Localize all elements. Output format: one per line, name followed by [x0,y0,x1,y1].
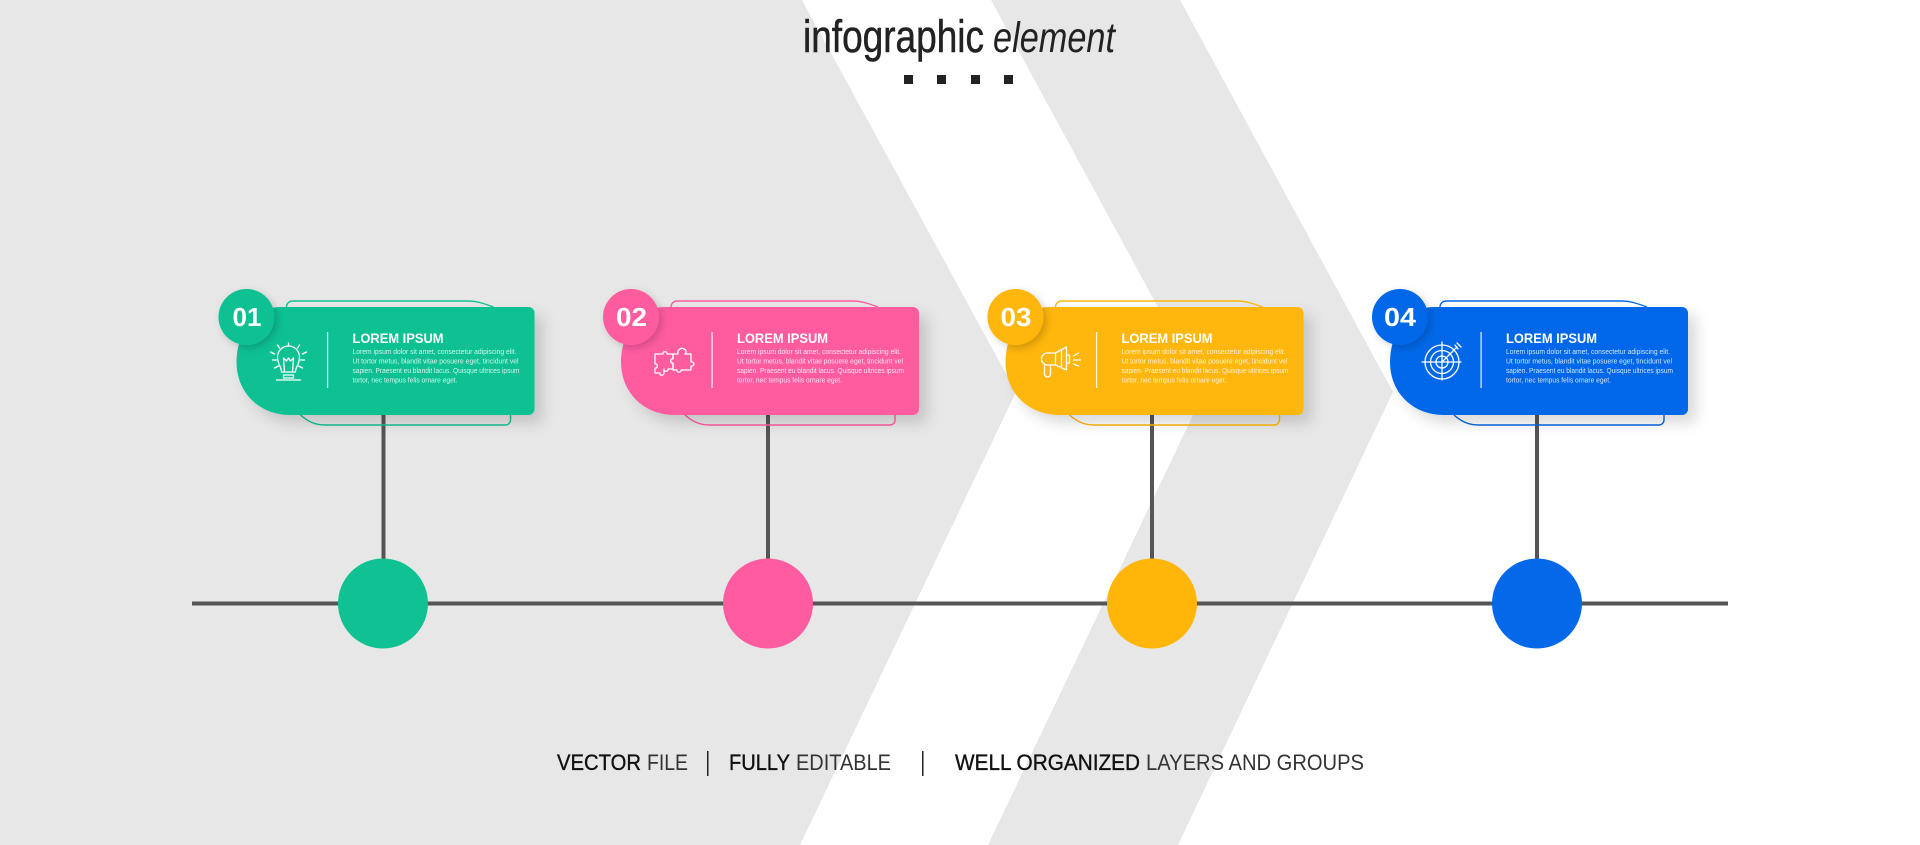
body text: tortor, nec tempus felis ornare eget. [1506,376,1611,384]
title: element [993,14,1117,62]
panel: step 01 [218,289,534,425]
connector 03 [1150,415,1154,565]
card outline [1056,301,1280,425]
footer tagline: EDITABLE [796,750,891,775]
body text: sapien. Praesent eu blandit lacus. Quisque ultrices ipsum [352,366,520,375]
number badge: 01 [232,302,262,332]
body text [737,347,904,384]
body text: Ut tortor metus, blandit vitae posuere eget, tincidunt vel [352,356,519,366]
heading: LOREM IPSUM [352,330,444,346]
connector 02 [766,415,770,565]
card body [1006,307,1304,415]
number badge [218,289,274,345]
panel: step 03 [988,289,1304,425]
icon: target [1422,342,1461,380]
icon: megaphone [1042,347,1080,377]
body text: sapien. Praesent eu blandit lacus. Quisque ultrices ipsum [1506,366,1673,375]
body text [1506,347,1673,384]
body text: Ut tortor metus, blandit vitae posuere eget, tincidunt vel [1122,356,1288,366]
divider [327,332,328,388]
timeline node 04 [1492,558,1582,648]
heading: LOREM IPSUM [1122,330,1212,346]
body text: Lorem ipsum dolor sit amet, consectetur adipiscing elit. [1122,347,1286,356]
background chevron left [0,0,1016,845]
panel: step 02 [603,289,919,425]
connector 01 [382,415,386,565]
timeline node 02 [723,558,813,648]
card body [236,307,534,415]
footer tagline: FILE [647,750,688,775]
card outline [286,301,510,425]
card outline [1440,301,1664,425]
icon: puzzle pieces [655,348,694,375]
body text: tortor, nec tempus felis ornare eget. [352,376,458,384]
body text [1122,347,1288,384]
body text: Ut tortor metus, blandit vitae posuere eget, tincidunt vel [1506,356,1672,366]
body text: Ut tortor metus, blandit vitae posuere eget, tincidunt vel [737,356,903,366]
divider [1480,332,1482,388]
title dots [904,75,1013,84]
body text [352,347,520,384]
divider [1096,332,1097,388]
panel: step 04 [1372,289,1688,425]
number badge: 03 [1000,302,1032,332]
number badge [1372,289,1428,345]
body text: tortor, nec tempus felis ornare eget. [737,376,842,384]
icon: light bulb [270,343,306,380]
body text: Lorem ipsum dolor sit amet, consectetur adipiscing elit. [352,347,516,356]
number badge: 02 [616,302,647,332]
card outline [671,301,895,425]
card body [621,307,919,415]
connector 04 [1535,415,1539,565]
footer tagline: WELL ORGANIZED [955,750,1140,775]
body text: tortor, nec tempus felis ornare eget. [1122,376,1226,384]
body text: Lorem ipsum dolor sit amet, consectetur adipiscing elit. [737,347,901,356]
footer tagline: VECTOR [557,750,641,775]
card body [1390,307,1688,415]
heading: LOREM IPSUM [737,330,828,346]
footer tagline [557,750,1364,776]
number badge [988,289,1044,345]
number badge: 04 [1384,302,1417,332]
body text: Lorem ipsum dolor sit amet, consectetur adipiscing elit. [1506,347,1670,356]
title: infographic [803,11,984,62]
background chevron right [988,0,1393,845]
divider [712,332,713,388]
body text: sapien. Praesent eu blandit lacus. Quisque ultrices ipsum [1122,366,1288,375]
footer tagline: FULLY [729,750,790,775]
timeline axis [192,602,1728,606]
timeline node 01 [338,558,428,648]
footer tagline: LAYERS AND GROUPS [1146,750,1364,775]
number badge [603,289,659,345]
heading: LOREM IPSUM [1506,330,1597,346]
body text: sapien. Praesent eu blandit lacus. Quisque ultrices ipsum [737,366,904,375]
timeline node 03 [1107,558,1197,648]
